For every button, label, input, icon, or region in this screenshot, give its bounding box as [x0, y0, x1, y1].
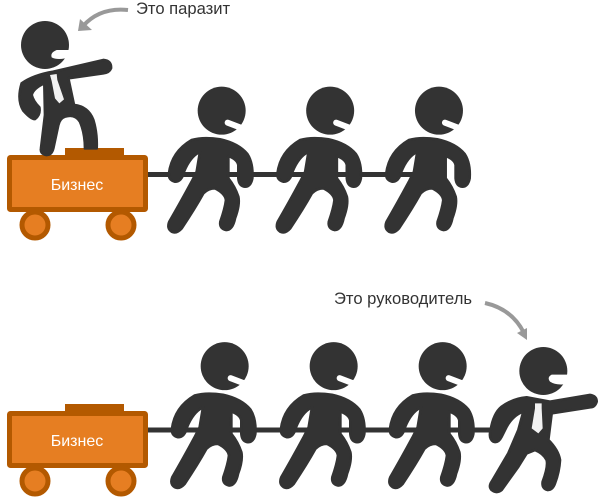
bottom worker 3 — [389, 342, 473, 488]
bottom worker 2 — [280, 342, 364, 488]
parasite boss figure — [20, 21, 111, 155]
bottom cart label: Бизнес — [51, 433, 103, 450]
top worker 2 — [277, 87, 361, 232]
bottom scene: leader pulling with the team — [10, 289, 597, 494]
bottom cart — [10, 404, 146, 494]
top scene: parasite on the cart — [10, 0, 470, 238]
top worker 1 — [168, 87, 252, 232]
bottom worker 1 — [171, 342, 255, 488]
arrow to leader — [485, 303, 527, 340]
top worker 3 — [386, 87, 470, 232]
arrow to parasite — [78, 10, 128, 31]
leader caption: Это руководитель — [334, 289, 472, 308]
top cart label: Бизнес — [51, 177, 103, 194]
top cart — [10, 148, 146, 238]
top rope — [146, 172, 446, 177]
bottom rope — [146, 428, 498, 432]
leader figure — [490, 347, 597, 492]
